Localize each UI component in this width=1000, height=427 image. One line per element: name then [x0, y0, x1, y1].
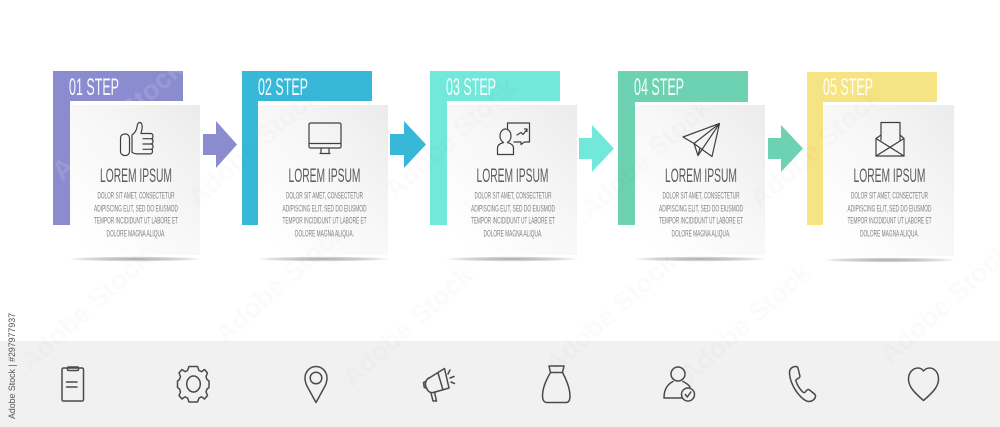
step 3 label: 03 STEP — [446, 74, 496, 101]
icon: gear — [178, 366, 209, 402]
step 1 heading: LOREM IPSUM — [100, 165, 172, 187]
arrow: step 4 to 5 — [768, 125, 803, 172]
step 2 card — [258, 105, 388, 255]
icon: heart — [908, 368, 938, 400]
watermarks: Adobe Stock — [574, 91, 717, 224]
step 5 card — [824, 105, 954, 256]
icon: monitor — [309, 123, 341, 154]
step 4 card shadow — [632, 256, 768, 262]
bottom icon band — [0, 341, 1000, 427]
icon: open envelope — [876, 122, 904, 156]
panel: step 3 — [430, 71, 580, 262]
step 3 description: DOLOR SIT AMET, CONSECTETUR — [474, 190, 552, 200]
step 3 description — [471, 190, 555, 238]
watermarks: Adobe Stock — [744, 81, 887, 214]
icon: money bag — [542, 366, 570, 402]
icon: presenter with chart — [498, 123, 530, 154]
step 4 colour tab — [618, 71, 748, 225]
step 5 description — [848, 190, 932, 238]
step 1 label: 01 STEP — [69, 74, 119, 101]
step 1 card — [70, 105, 200, 255]
panel: step 4 — [618, 71, 768, 262]
step 2 heading: LOREM IPSUM — [288, 165, 360, 187]
panel: step 2 — [242, 71, 391, 262]
watermarks: Adobe Stock — [336, 259, 479, 392]
step 4 description — [659, 190, 743, 238]
watermarks: Adobe Stock — [379, 71, 522, 204]
step 3 colour tab — [430, 71, 560, 225]
step 1 description: TEMPOR INCIDIDUNT UT LABORE ET — [94, 216, 178, 226]
step 1 description: DOLORE MAGNA ALIQUA. — [106, 228, 166, 238]
step 1 description — [94, 190, 178, 238]
icon: user with check — [664, 367, 694, 401]
watermarks: Adobe Stock — [539, 246, 682, 379]
step 4 card — [635, 105, 765, 255]
step 3 card shadow — [444, 256, 580, 262]
step 4 description: DOLORE MAGNA ALIQUA. — [672, 228, 730, 238]
panel: step 5 — [807, 72, 957, 262]
step 1 card shadow — [67, 256, 203, 262]
step 4 label: 04 STEP — [634, 74, 684, 101]
step 2 label: 02 STEP — [258, 74, 308, 101]
step 3 description: ADIPISCING ELIT, SED DO EIUSMOD — [471, 204, 555, 214]
step 2 description: ADIPISCING ELIT, SED DO EIUSMOD — [282, 204, 367, 214]
stock credit: Adobe Stock | #297977937 — [7, 313, 18, 419]
step 4 heading: LOREM IPSUM — [665, 165, 737, 187]
step 5 description: DOLOR SIT AMET, CONSECTETUR — [851, 190, 928, 200]
step 5 card shadow — [821, 258, 957, 262]
step 5 description: ADIPISCING ELIT, SED DO EIUSMOD — [848, 204, 932, 214]
watermarks — [14, 53, 1000, 392]
step 3 description: TEMPOR INCIDIDUNT UT LABORE ET — [471, 216, 555, 226]
step 1 description: ADIPISCING ELIT, SED DO EIUSMOD — [94, 204, 178, 214]
step 5 description: DOLORE MAGNA ALIQUA. — [860, 228, 919, 238]
step 5 label: 05 STEP — [823, 74, 873, 101]
step 2 colour tab — [242, 71, 372, 225]
step 1 colour tab — [53, 71, 183, 225]
icon: thumbs up — [120, 122, 153, 156]
icon: paper plane — [683, 124, 720, 156]
step 2 description — [282, 190, 367, 238]
step 2 description: TEMPOR INCIDIDUNT UT LABORE ET — [282, 216, 367, 226]
arrow: step 1 to 2 — [203, 121, 237, 168]
panel: step 1 — [53, 71, 203, 262]
step 4 description: DOLOR SIT AMET, CONSECTETUR — [662, 190, 740, 200]
step 3 heading: LOREM IPSUM — [476, 165, 548, 187]
icon: clipboard — [62, 367, 84, 401]
step 4 description: ADIPISCING ELIT, SED DO EIUSMOD — [659, 204, 743, 214]
arrow: step 3 to 4 — [579, 125, 614, 172]
watermarks: Adobe Stock — [46, 53, 189, 186]
step 2 description: DOLORE MAGNA ALIQUA. — [295, 228, 354, 238]
watermarks: Adobe Stock — [182, 79, 325, 212]
step 2 card shadow — [255, 256, 391, 262]
watermarks: Adobe Stock — [14, 243, 157, 376]
icon: megaphone — [424, 368, 454, 401]
step 2 description: DOLOR SIT AMET, CONSECTETUR — [286, 190, 363, 200]
watermarks: Adobe Stock — [674, 256, 817, 389]
watermarks: Adobe Stock — [209, 216, 352, 349]
step 5 heading: LOREM IPSUM — [854, 165, 926, 187]
arrow: step 2 to 3 — [390, 121, 426, 168]
step 3 card — [447, 105, 577, 255]
icon: map pin — [305, 366, 327, 402]
step 4 description: TEMPOR INCIDIDUNT UT LABORE ET — [659, 216, 743, 226]
step 5 colour tab — [807, 72, 937, 225]
step 3 description: DOLORE MAGNA ALIQUA. — [484, 228, 542, 238]
icon: telephone — [790, 366, 816, 402]
step 1 description: DOLOR SIT AMET, CONSECTETUR — [98, 190, 175, 200]
